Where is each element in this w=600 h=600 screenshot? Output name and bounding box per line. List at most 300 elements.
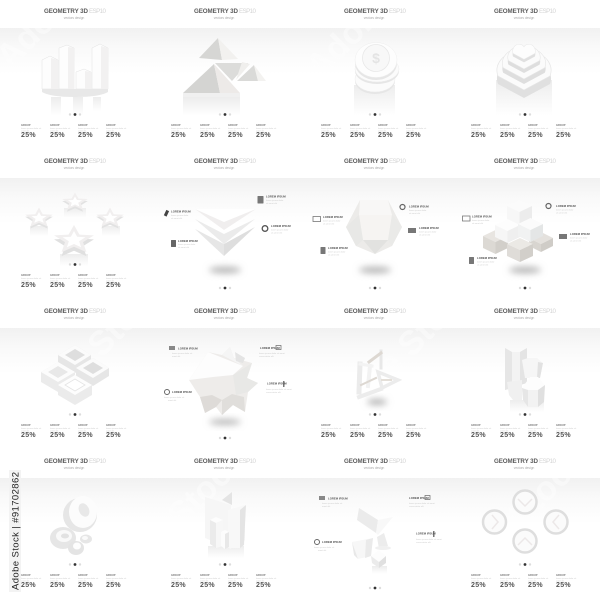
header: vectors design: [364, 466, 384, 470]
percent columns: [21, 123, 127, 139]
callouts: [314, 496, 442, 552]
coin stack: [354, 42, 399, 115]
ground shadow: [209, 266, 241, 274]
percent columns: amet elit: [406, 130, 415, 132]
percent columns: GROUP: [106, 573, 116, 577]
percent columns: 25%: [528, 132, 543, 139]
header: [344, 158, 407, 170]
percent columns: lorem ipsum dolor sit: [528, 427, 549, 430]
percent columns: amet elit: [50, 430, 59, 432]
faceted sphere: [346, 200, 402, 254]
hexagonal columns: [505, 348, 545, 412]
percent columns: lorem ipsum dolor sit: [50, 277, 71, 280]
header: vectors design: [364, 166, 384, 170]
header: [494, 158, 557, 170]
header: [344, 458, 407, 470]
percent columns: lorem ipsum dolor sit: [200, 577, 221, 580]
layered chevron: [195, 209, 256, 256]
percent columns: amet elit: [78, 280, 87, 282]
callouts: LOREM IPSUM: [266, 194, 286, 198]
callouts: sit amet elit: [570, 240, 581, 242]
callouts: LOREM IPSUM: [570, 232, 590, 236]
percent columns: 25%: [471, 582, 486, 589]
header: ESP10: [539, 308, 557, 315]
percent columns: amet elit: [50, 580, 59, 582]
header: [194, 458, 257, 470]
percent columns: 25%: [78, 132, 93, 139]
pager dots: [519, 287, 531, 289]
header: GEOMETRY 3D: [494, 308, 539, 315]
callouts: LOREM IPSUM: [556, 204, 576, 208]
percent columns: lorem ipsum dolor sit: [171, 577, 192, 580]
percent columns: lorem ipsum dolor sit: [471, 427, 492, 430]
pager dots: [219, 563, 231, 566]
percent columns: 25%: [21, 282, 36, 289]
percent columns: GROUP: [406, 123, 416, 127]
percent columns: GROUP: [528, 123, 538, 127]
panel: open boxes: [21, 308, 127, 439]
header: ESP10: [239, 8, 257, 15]
callouts: amet elit: [322, 505, 331, 508]
percent columns: amet elit: [50, 280, 59, 282]
header: ESP10: [239, 458, 257, 465]
percent columns: lorem ipsum dolor sit: [21, 277, 42, 280]
callouts: LOREM IPSUM: [271, 224, 291, 228]
percent columns: lorem ipsum dolor sit: [500, 427, 521, 430]
panel: hearts: [471, 8, 577, 139]
percent columns: amet elit: [500, 580, 509, 582]
header: GEOMETRY 3D: [44, 308, 89, 315]
callouts: sit amet elit: [178, 246, 189, 249]
percent columns: amet elit: [256, 130, 265, 132]
sphere and rings: [50, 496, 97, 555]
percent columns: GROUP: [228, 573, 238, 577]
header: ESP10: [389, 458, 407, 465]
ground shadow: [209, 419, 241, 425]
percent columns: [471, 423, 577, 439]
four hollow blocks: [41, 345, 109, 405]
percent columns: amet elit: [171, 580, 180, 582]
percent columns: lorem ipsum dolor sit: [556, 127, 577, 130]
percent columns: GROUP: [378, 123, 388, 127]
panel: bar columns: [21, 8, 127, 139]
percent columns: GROUP: [378, 423, 388, 427]
percent columns: 25%: [200, 582, 215, 589]
header: ESP10: [89, 8, 107, 15]
pager dots: [369, 287, 381, 289]
ground shadow: [359, 266, 391, 274]
header: [344, 308, 407, 320]
callouts: LOREM IPSUM: [409, 496, 429, 500]
pager dots: [369, 587, 381, 589]
callouts: lorem ipsum dolor sit: [322, 502, 343, 505]
percent columns: GROUP: [350, 423, 360, 427]
percent columns: GROUP: [171, 573, 181, 577]
percent columns: lorem ipsum dolor sit: [528, 127, 549, 130]
percent columns: amet elit: [200, 580, 209, 582]
percent columns: amet elit: [528, 130, 537, 132]
header: GEOMETRY 3D: [344, 308, 389, 315]
percent columns: 25%: [378, 132, 393, 139]
header: vectors design: [364, 16, 384, 20]
header: vectors design: [364, 316, 384, 320]
panel: chevrons: [164, 158, 291, 289]
percent columns: GROUP: [50, 573, 60, 577]
header: vectors design: [514, 166, 534, 170]
callouts: sit amet elit: [556, 212, 567, 214]
percent columns: 25%: [50, 432, 65, 439]
header: [344, 8, 407, 20]
percent columns: lorem ipsum dolor sit: [556, 577, 577, 580]
watermark: Adobe Stock: [309, 272, 483, 446]
callouts: consectetur elit: [416, 541, 431, 544]
percent columns: amet elit: [321, 430, 330, 432]
percent columns: 25%: [528, 582, 543, 589]
percent columns: 25%: [106, 132, 121, 139]
percent columns: 25%: [50, 582, 65, 589]
percent columns: amet elit: [228, 130, 237, 132]
panel: stars: [21, 158, 127, 289]
callouts: sit amet elit: [477, 264, 488, 266]
callouts: lorem ipsum dolor: [419, 230, 437, 234]
callouts: lorem ipsum dolor: [477, 260, 495, 264]
percent columns: lorem ipsum dolor sit: [406, 427, 427, 430]
callouts: lorem ipsum dolor: [472, 219, 490, 222]
percent columns: lorem ipsum dolor sit: [471, 127, 492, 130]
header: GEOMETRY 3D: [194, 308, 239, 315]
percent columns: [471, 123, 577, 139]
header: GEOMETRY 3D: [44, 458, 89, 465]
percent columns: amet elit: [471, 580, 480, 582]
header: ESP10: [539, 458, 557, 465]
percent columns: GROUP: [78, 273, 88, 277]
stacked cubes: [483, 200, 553, 262]
percent columns: amet elit: [21, 430, 30, 432]
callouts: lorem ipsum dolor sit: [164, 396, 185, 399]
header: vectors design: [214, 316, 234, 320]
percent columns: amet elit: [21, 580, 30, 582]
four stars: [25, 192, 124, 266]
header: vectors design: [214, 166, 234, 170]
percent columns: lorem ipsum dolor sit: [106, 277, 127, 280]
percent columns: 25%: [321, 432, 336, 439]
percent columns: 25%: [500, 432, 515, 439]
callouts: [164, 346, 292, 402]
callouts: LOREM IPSUM: [419, 226, 439, 230]
stock id label: Adobe Stock | #91702862: [10, 472, 22, 590]
percent columns: lorem ipsum dolor sit: [21, 577, 42, 580]
callouts: sit amet elit: [409, 212, 420, 215]
percent columns: 25%: [256, 132, 271, 139]
callouts: lorem ipsum dolor: [271, 228, 289, 232]
percent columns: 25%: [406, 432, 421, 439]
percent columns: GROUP: [471, 123, 481, 127]
percent columns: 25%: [406, 132, 421, 139]
pager dots: [369, 113, 381, 116]
percent columns: 25%: [228, 582, 243, 589]
panel: polyhedron: [313, 158, 439, 289]
header: GEOMETRY 3D: [194, 158, 239, 165]
percent columns: GROUP: [50, 123, 60, 127]
percent columns: lorem ipsum dolor sit: [78, 127, 99, 130]
percent columns: amet elit: [106, 280, 115, 282]
percent columns: lorem ipsum dolor sit: [256, 127, 277, 130]
percent columns: 25%: [21, 432, 36, 439]
callouts: sit amet elit: [419, 234, 430, 236]
percent columns: 25%: [106, 432, 121, 439]
pager dots: [69, 563, 81, 566]
callouts: consectetur elit: [409, 505, 424, 508]
pager dots: [219, 287, 231, 289]
four circular rings: [483, 490, 568, 552]
callouts: LOREM IPSUM: [328, 246, 348, 250]
header: ESP10: [89, 158, 107, 165]
percent columns: GROUP: [406, 423, 416, 427]
percent columns: 25%: [171, 582, 186, 589]
header: GEOMETRY 3D: [44, 158, 89, 165]
percent columns: [471, 573, 577, 589]
panel: spiked star: [164, 308, 292, 439]
percent columns: 25%: [171, 132, 186, 139]
callouts: lorem ipsum dolor sit: [314, 546, 335, 549]
isometric blocks: [205, 492, 246, 558]
header: vectors design: [64, 316, 84, 320]
percent columns: lorem ipsum dolor sit: [78, 577, 99, 580]
3D bars on a platform: [42, 44, 108, 115]
percent columns: GROUP: [78, 123, 88, 127]
percent columns: GROUP: [471, 423, 481, 427]
percent columns: lorem ipsum dolor sit: [21, 127, 42, 130]
percent columns: 25%: [200, 132, 215, 139]
percent columns: amet elit: [78, 430, 87, 432]
header: ESP10: [239, 158, 257, 165]
header: GEOMETRY 3D: [344, 458, 389, 465]
pyramid group: [183, 38, 266, 115]
header: [494, 458, 557, 470]
percent columns: amet elit: [500, 430, 509, 432]
percent columns: GROUP: [321, 123, 331, 127]
percent columns: amet elit: [378, 430, 387, 432]
percent columns: amet elit: [471, 430, 480, 432]
percent columns: amet elit: [171, 130, 180, 132]
callouts: lorem ipsum dolor: [266, 199, 284, 202]
callouts: lorem ipsum dolor sit amet: [409, 502, 435, 505]
callouts: LOREM IPSUM: [322, 540, 342, 544]
header: vectors design: [64, 166, 84, 170]
percent columns: [21, 573, 127, 589]
pager dots: [519, 563, 531, 566]
percent columns: GROUP: [500, 423, 510, 427]
percent columns: lorem ipsum dolor sit: [500, 127, 521, 130]
header: GEOMETRY 3D: [494, 8, 539, 15]
header: vectors design: [64, 466, 84, 470]
callouts: lorem ipsum dolor: [570, 236, 588, 240]
percent columns: amet elit: [228, 580, 237, 582]
percent columns: lorem ipsum dolor sit: [471, 577, 492, 580]
percent columns: 25%: [350, 432, 365, 439]
tilted cubes: [352, 508, 393, 574]
percent columns: lorem ipsum dolor sit: [321, 127, 342, 130]
header: GEOMETRY 3D: [344, 158, 389, 165]
percent columns: amet elit: [78, 580, 87, 582]
callouts: sit amet elit: [472, 222, 483, 225]
percent columns: GROUP: [50, 423, 60, 427]
percent columns: amet elit: [21, 130, 30, 132]
header: ESP10: [389, 308, 407, 315]
panel: rounded shapes: [21, 458, 127, 589]
percent columns: lorem ipsum dolor sit: [50, 577, 71, 580]
percent columns: amet elit: [106, 580, 115, 582]
percent columns: 25%: [321, 132, 336, 139]
header: ESP10: [239, 308, 257, 315]
percent columns: GROUP: [78, 423, 88, 427]
pager dots: [369, 413, 381, 416]
percent columns: GROUP: [528, 573, 538, 577]
percent columns: lorem ipsum dolor sit: [321, 427, 342, 430]
percent columns: [171, 573, 277, 589]
percent columns: amet elit: [556, 580, 565, 582]
header: GEOMETRY 3D: [344, 8, 389, 15]
percent columns: [21, 423, 127, 439]
header: [194, 158, 257, 170]
watermark: Adobe Stock: [0, 272, 173, 446]
percent columns: 25%: [21, 582, 36, 589]
percent columns: 25%: [106, 582, 121, 589]
percent columns: lorem ipsum dolor sit: [78, 277, 99, 280]
panel: impossible frames: [321, 308, 427, 439]
percent columns: lorem ipsum dolor sit: [406, 127, 427, 130]
percent columns: GROUP: [21, 573, 31, 577]
percent columns: GROUP: [256, 573, 266, 577]
stepped heart: [496, 44, 552, 115]
callouts: lorem ipsum dolor: [409, 209, 427, 212]
panel: hex prisms: [471, 308, 577, 439]
percent columns: amet elit: [21, 280, 30, 282]
header: ESP10: [539, 158, 557, 165]
percent columns: 25%: [556, 132, 571, 139]
percent columns: 25%: [528, 432, 543, 439]
percent columns: lorem ipsum dolor sit: [350, 427, 371, 430]
percent columns: lorem ipsum dolor sit: [106, 127, 127, 130]
callouts: LOREM IPSUM: [172, 390, 192, 394]
percent columns: amet elit: [50, 130, 59, 132]
callouts: consectetur elit: [266, 391, 281, 394]
header: [494, 308, 557, 320]
callouts: sit amet elit: [271, 232, 282, 234]
percent columns: GROUP: [21, 273, 31, 277]
percent columns: [171, 123, 277, 139]
percent columns: amet elit: [528, 580, 537, 582]
callouts: LOREM IPSUM: [477, 256, 497, 260]
percent columns: GROUP: [200, 573, 210, 577]
header: GEOMETRY 3D: [44, 8, 89, 15]
callouts: LOREM IPSUM: [171, 210, 191, 214]
percent columns: lorem ipsum dolor sit: [256, 577, 277, 580]
percent columns: 25%: [256, 582, 271, 589]
ground shadow: [367, 399, 387, 405]
callouts: lorem ipsum dolor: [323, 220, 341, 222]
percent columns: GROUP: [471, 573, 481, 577]
callouts: lorem ipsum dolor: [556, 208, 574, 212]
callouts: LOREM IPSUM: [323, 215, 343, 219]
percent columns: GROUP: [228, 123, 238, 127]
callouts: lorem ipsum dolor: [328, 250, 346, 254]
pager dots: [69, 413, 81, 416]
callouts: [313, 204, 439, 256]
header: [44, 8, 107, 20]
percent columns: GROUP: [556, 573, 566, 577]
callouts: sit amet elit: [323, 222, 334, 226]
callouts: amet elit: [168, 399, 177, 402]
pager dots: [219, 113, 231, 116]
percent columns: GROUP: [556, 423, 566, 427]
percent columns: 25%: [500, 132, 515, 139]
interlocking frames: [359, 351, 398, 397]
percent columns: lorem ipsum dolor sit: [228, 577, 249, 580]
percent columns: 25%: [106, 282, 121, 289]
pager dots: [69, 113, 81, 116]
header: vectors design: [514, 466, 534, 470]
percent columns: amet elit: [471, 130, 480, 132]
callouts: LOREM IPSUM: [267, 382, 287, 386]
percent columns: GROUP: [528, 423, 538, 427]
percent columns: lorem ipsum dolor sit: [106, 577, 127, 580]
percent columns: 25%: [50, 132, 65, 139]
callouts: lorem ipsum dolor sit: [172, 352, 193, 355]
percent columns: GROUP: [321, 423, 331, 427]
percent columns: 25%: [50, 282, 65, 289]
percent columns: GROUP: [171, 123, 181, 127]
callouts: LOREM IPSUM: [178, 239, 198, 243]
percent columns: 25%: [471, 432, 486, 439]
header: GEOMETRY 3D: [494, 158, 539, 165]
callouts: sit amet elit: [328, 254, 339, 256]
percent columns: amet elit: [556, 430, 565, 432]
callouts: [164, 194, 291, 249]
percent columns: 25%: [21, 132, 36, 139]
header: GEOMETRY 3D: [494, 458, 539, 465]
ground shadow: [509, 266, 541, 274]
percent columns: amet elit: [256, 580, 265, 582]
percent columns: lorem ipsum dolor sit: [50, 427, 71, 430]
panel: pyramids: [171, 8, 277, 139]
header: ESP10: [89, 458, 107, 465]
percent columns: amet elit: [78, 130, 87, 132]
header: ESP10: [389, 158, 407, 165]
percent columns: amet elit: [106, 130, 115, 132]
percent columns: lorem ipsum dolor sit: [200, 127, 221, 130]
header: ESP10: [539, 8, 557, 15]
percent columns: 25%: [78, 282, 93, 289]
percent columns: amet elit: [321, 130, 330, 132]
panel: rings: [471, 458, 577, 589]
percent columns: lorem ipsum dolor sit: [350, 127, 371, 130]
header: ESP10: [389, 8, 407, 15]
header: GEOMETRY 3D: [194, 458, 239, 465]
percent columns: GROUP: [106, 273, 116, 277]
header: vectors design: [64, 16, 84, 20]
callouts: [462, 204, 590, 266]
callouts: lorem ipsum dolor: [178, 243, 196, 246]
icon: dollar sign: $: [372, 50, 380, 66]
header: vectors design: [514, 16, 534, 20]
percent columns: lorem ipsum dolor sit: [378, 127, 399, 130]
header: [44, 458, 107, 470]
percent columns: lorem ipsum dolor sit: [171, 127, 192, 130]
percent columns: lorem ipsum dolor sit: [556, 427, 577, 430]
percent columns: GROUP: [21, 123, 31, 127]
header: GEOMETRY 3D: [194, 8, 239, 15]
